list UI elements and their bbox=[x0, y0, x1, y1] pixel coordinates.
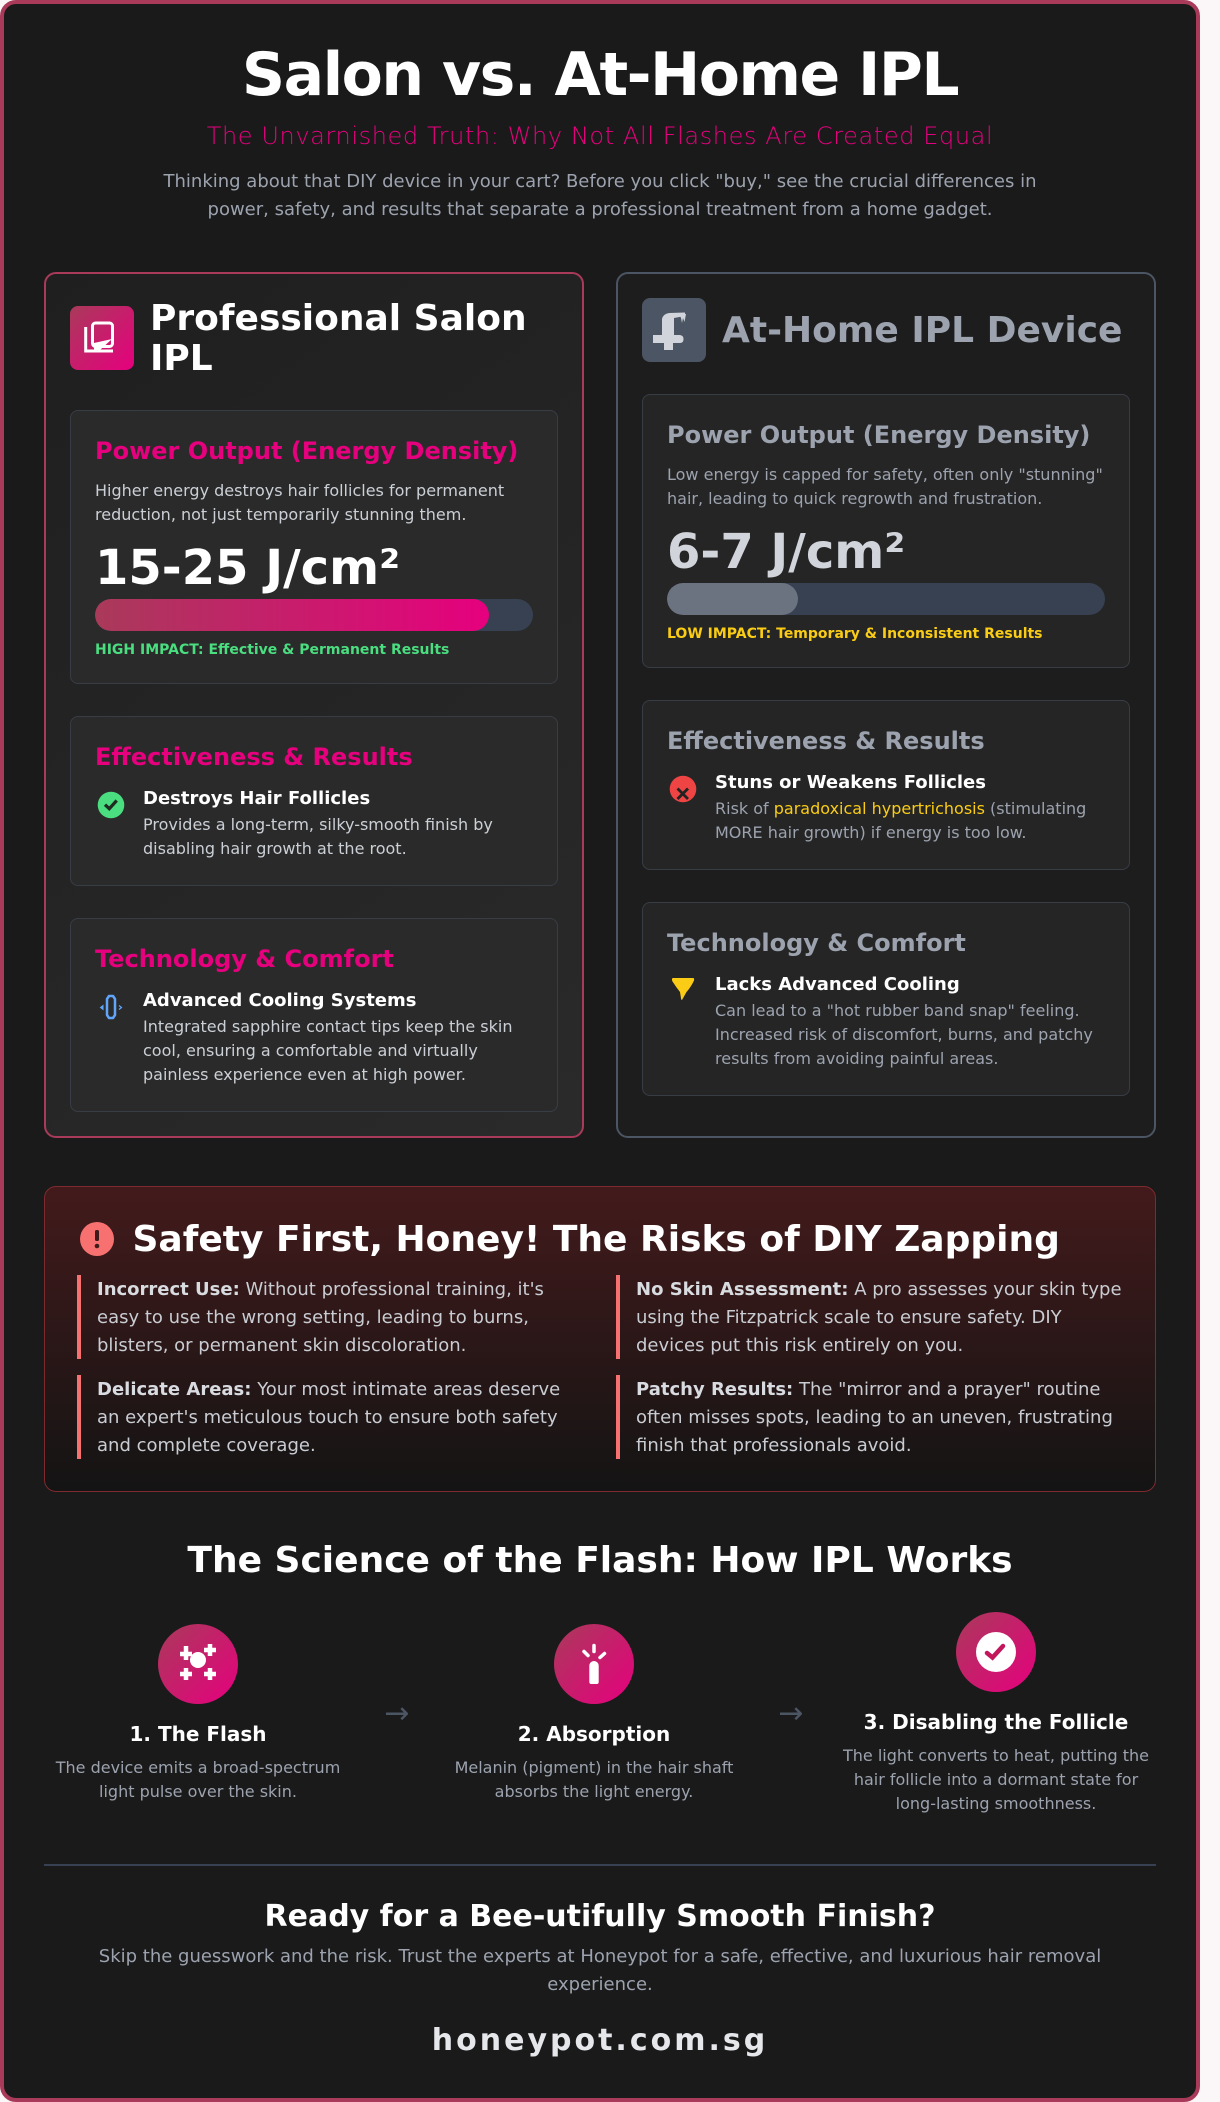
card: home power output bbox=[642, 394, 1130, 668]
list item: advanced cooling bbox=[100, 990, 512, 1084]
step 2: absorption: 2. Absorption bbox=[518, 1722, 670, 1746]
science heading: The Science of the Flash: How IPL Works bbox=[187, 1540, 1013, 1581]
card: salon technology: Technology & Comfort bbox=[95, 945, 394, 973]
list item: stuns follicles bbox=[670, 772, 1086, 842]
bar: home power 30% bbox=[667, 583, 1105, 615]
icon: salon device bbox=[70, 306, 134, 370]
card: salon effectiveness: Effectiveness & Results bbox=[95, 743, 413, 771]
list item: advanced cooling: Advanced Cooling Systems bbox=[143, 990, 416, 1011]
step 3: disabling the follicle: long-lasting smoothness. bbox=[896, 1794, 1096, 1813]
step 1: the flash bbox=[56, 1624, 340, 1801]
list item: destroys follicles bbox=[98, 788, 493, 858]
website: honeypot.com.sg bbox=[432, 2023, 768, 2058]
arrow 1: → bbox=[384, 1696, 410, 1731]
panel heading: at-home device bbox=[642, 298, 1122, 362]
card: salon power output bbox=[70, 410, 558, 684]
risk: no skin assessment: No Skin Assessment: A pro assesses your skin type using the Fitzpatrick scale to ensure safety. DIY devices put this risk entirely on you. bbox=[636, 1279, 1122, 1356]
icon: cooling capsule bbox=[100, 994, 122, 1020]
step 1: the flash: light pulse over the skin. bbox=[99, 1782, 297, 1801]
impact label: LOW IMPACT: Temporary & Inconsistent Results bbox=[667, 626, 1043, 642]
risk: patchy results: Patchy Results: The "mirror and a prayer" routine often misses spots, leading to an uneven, frustrating finish that professionals avoid. bbox=[636, 1379, 1113, 1456]
card: home effectiveness: Effectiveness & Results bbox=[667, 727, 985, 755]
icon: check badge bbox=[956, 1612, 1036, 1692]
icon: green check bbox=[98, 792, 124, 818]
step 2: absorption: Melanin (pigment) in the hair shaft bbox=[455, 1758, 733, 1777]
subtitle: The Unvarnished Truth: Why Not All Flashes Are Created Equal bbox=[207, 122, 993, 150]
risk: incorrect use: Incorrect Use: Without professional training, it's easy to use the wrong setting, leading to burns, blisters, or permanent skin discoloration. bbox=[97, 1279, 544, 1356]
card: salon effectiveness bbox=[70, 716, 558, 886]
icon: home device bbox=[642, 298, 706, 362]
card: salon power output: Power Output (Energy Density) bbox=[95, 437, 518, 465]
step 3: disabling the follicle bbox=[842, 1612, 1149, 1813]
description: Low energy is capped for safety, often only "stunning" hair, leading to quick regrowth and frustration. bbox=[667, 465, 1103, 508]
step 3: disabling the follicle: hair follicle into a dormant state for bbox=[854, 1770, 1138, 1789]
panel: at-home IPL device bbox=[616, 272, 1156, 1138]
list item: lacks cooling: Lacks Advanced Cooling bbox=[715, 974, 960, 995]
card: home technology: Technology & Comfort bbox=[667, 929, 966, 957]
call to action heading: Ready for a Bee-utifully Smooth Finish? bbox=[264, 1899, 936, 1934]
card: home power output: Power Output (Energy Density) bbox=[667, 421, 1090, 449]
list item: lacks cooling: Can lead to a "hot rubber band snap" feeling. Increased risk of discomfort, burns, and patchy results from avoiding painful areas. bbox=[715, 1001, 1093, 1068]
list item: stuns follicles: Stuns or Weakens Follicles bbox=[715, 772, 986, 793]
step 2: absorption: absorbs the light energy. bbox=[495, 1782, 693, 1801]
impact label: HIGH IMPACT: Effective & Permanent Results bbox=[95, 642, 449, 658]
safety heading: Safety First, Honey! The Risks of DIY Zapping bbox=[132, 1219, 1060, 1260]
icon: light absorption bbox=[554, 1624, 634, 1704]
list item: lacks cooling bbox=[672, 974, 1093, 1068]
arrow 2: → bbox=[778, 1696, 804, 1731]
panel heading: at-home device: At-Home IPL Device bbox=[722, 310, 1122, 351]
step 1: the flash: The device emits a broad-spectrum bbox=[56, 1758, 340, 1777]
intro paragraph: Thinking about that DIY device in your cart? Before you click "buy," see the crucial differences in power, safety, and results that separate a professional treatment from a home gadget. bbox=[164, 171, 1036, 220]
step 3: disabling the follicle: The light converts to heat, putting the bbox=[843, 1746, 1149, 1765]
list item: destroys follicles: Destroys Hair Follicles bbox=[143, 788, 370, 809]
card: home effectiveness bbox=[642, 700, 1130, 870]
description: Higher energy destroys hair follicles for permanent reduction, not just temporarily stunning them. bbox=[95, 481, 504, 524]
card: home technology bbox=[642, 902, 1130, 1096]
panel heading: professional salon: Professional Salon IPL bbox=[150, 298, 527, 379]
title: Salon vs. At-Home IPL bbox=[242, 40, 958, 110]
list item: destroys follicles: Provides a long-term, silky-smooth finish by disabling hair growth at the root. bbox=[143, 815, 493, 858]
stat: home energy: 6-7 J/cm² bbox=[667, 524, 905, 580]
call to action text: Skip the guesswork and the risk. Trust the experts at Honeypot for a safe, effective, and luxurious hair removal experience. bbox=[99, 1946, 1101, 1995]
icon: alert bbox=[80, 1222, 114, 1256]
bar: salon power 90% bbox=[95, 599, 533, 631]
list item: stuns follicles: Risk of paradoxical hypertrichosis (stimulating MORE hair growth) if energy is too low. bbox=[715, 799, 1086, 842]
step 1: the flash: 1. The Flash bbox=[129, 1722, 267, 1746]
step 3: disabling the follicle: 3. Disabling the Follicle bbox=[864, 1710, 1128, 1734]
step 2: absorption bbox=[455, 1624, 733, 1801]
panel: safety risks bbox=[44, 1186, 1156, 1492]
list item: advanced cooling: Integrated sapphire contact tips keep the skin cool, ensuring a comfortable and virtually painless experience even at high power. bbox=[143, 1017, 512, 1084]
card: salon technology bbox=[70, 918, 558, 1112]
panel: professional salon IPL bbox=[44, 272, 584, 1138]
risk: delicate areas: Delicate Areas: Your most intimate areas deserve an expert's meticulous touch to ensure both safety and complete coverage. bbox=[97, 1379, 560, 1456]
icon: warning funnel bbox=[672, 978, 694, 1000]
stat: salon energy: 15-25 J/cm² bbox=[95, 540, 400, 596]
icon: red cross bbox=[670, 776, 696, 802]
icon: flash sparkles bbox=[158, 1624, 238, 1704]
